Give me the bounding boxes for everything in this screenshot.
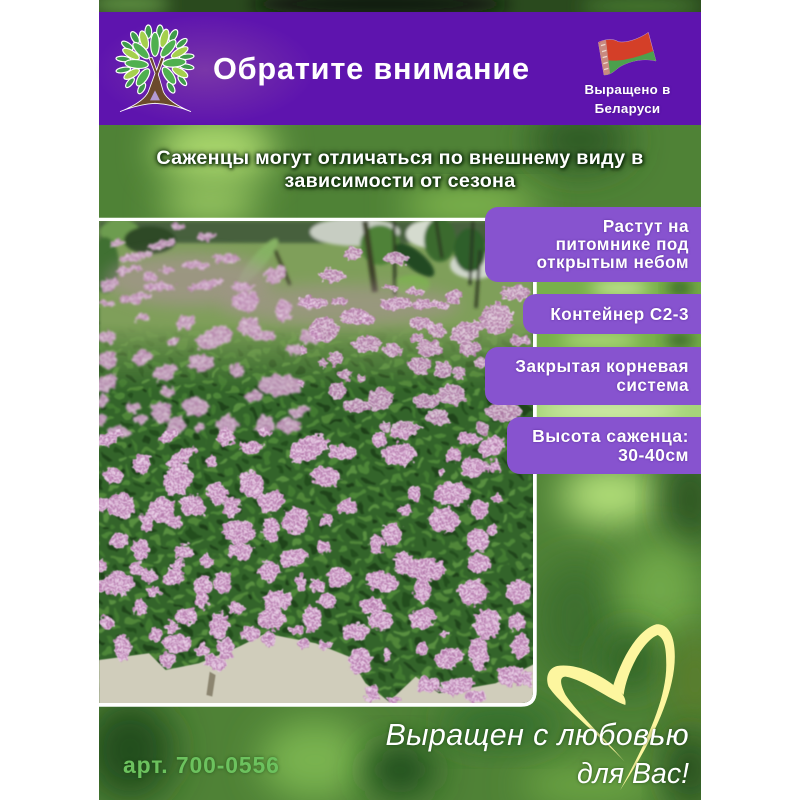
callout: grown outdoors: питомнике под — [556, 234, 689, 254]
callout: seedling height: Высота саженца: — [532, 426, 689, 446]
header band — [95, 12, 701, 125]
callout: closed root system: система — [616, 376, 689, 395]
callout: closed root system: Закрытая корневая — [515, 357, 689, 376]
article number: арт. 700-0556 — [123, 752, 280, 778]
subheading — [152, 146, 646, 462]
slogan — [386, 718, 689, 790]
flag caption: Беларуси — [595, 101, 660, 116]
callout: container — [523, 294, 701, 334]
icon: Belarus flag — [598, 32, 656, 75]
heart outline — [547, 624, 675, 790]
callout: closed root system — [485, 347, 701, 405]
slogan: Выращен с любовью — [386, 718, 689, 752]
callout: container: Контейнер С2-3 — [550, 304, 689, 324]
callout: seedling height: 30-40см — [618, 444, 689, 464]
background: blurred green foliage — [85, 0, 717, 800]
slogan: для Вас! — [577, 758, 689, 790]
subheading: Саженцы могут отличаться по внешнему виду в — [156, 147, 644, 169]
title: Обратите внимание — [213, 51, 530, 86]
flag caption — [584, 82, 671, 116]
callout: grown outdoors — [485, 207, 701, 282]
logo: tree — [116, 25, 194, 112]
photo: flowering spirea shrub — [99, 218, 537, 707]
subheading: зависимости от сезона — [284, 170, 515, 192]
flag caption: Выращено в — [584, 82, 671, 97]
callout: grown outdoors: открытым небом — [537, 252, 689, 272]
callout: seedling height — [507, 417, 701, 474]
callout: grown outdoors: Растут на — [603, 216, 689, 236]
